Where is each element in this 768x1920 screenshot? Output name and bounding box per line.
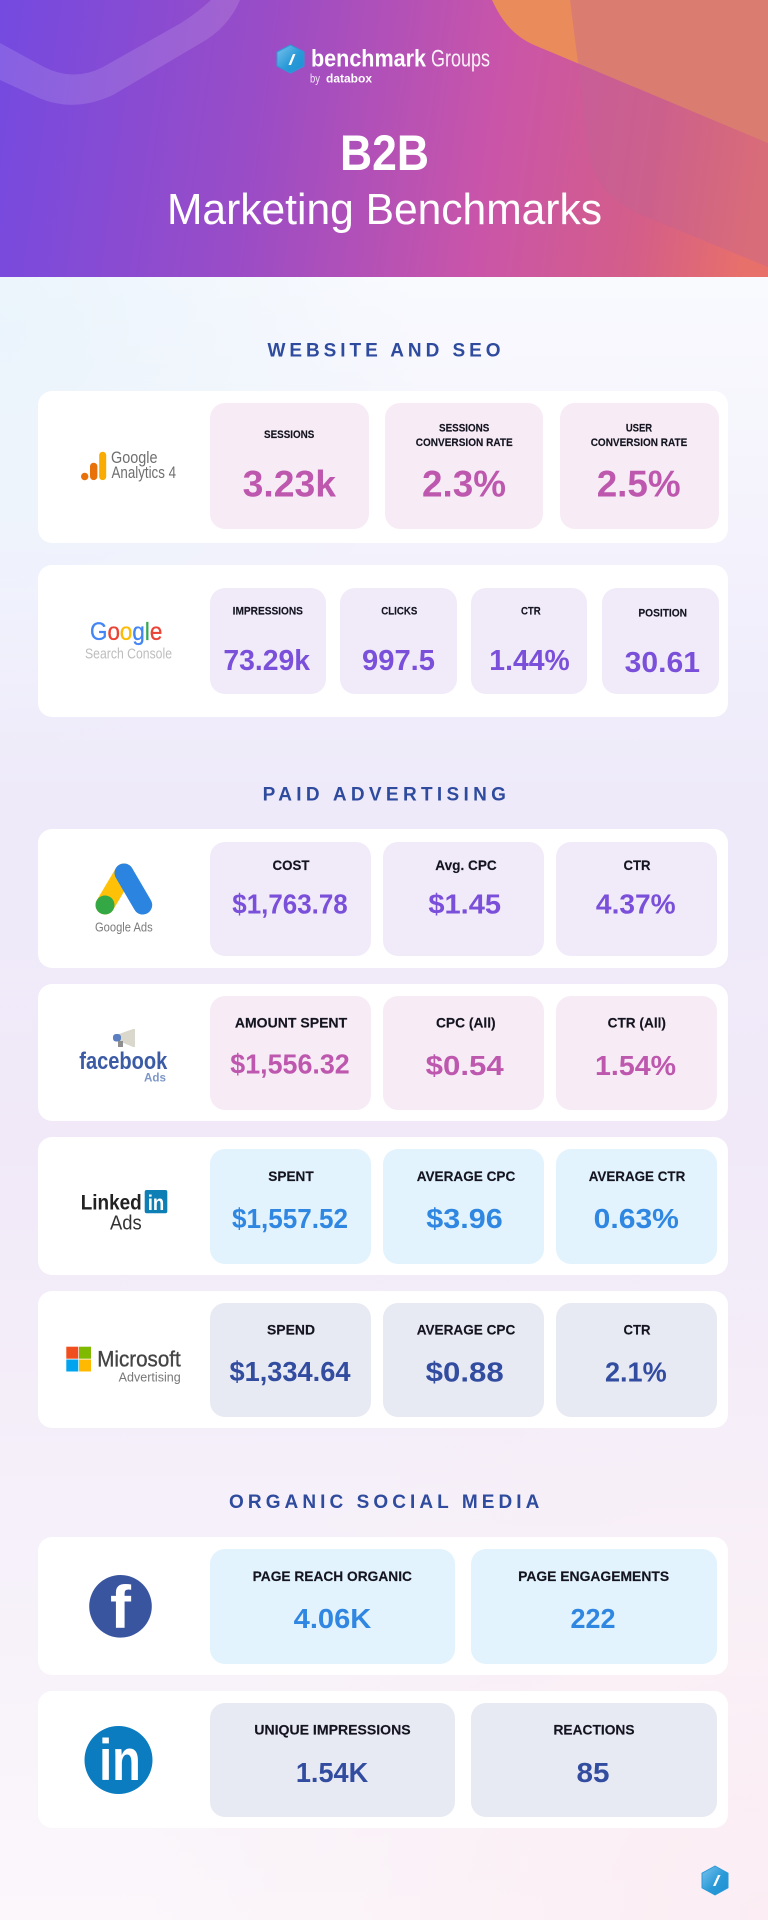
metric: cost bbox=[210, 842, 371, 956]
metric: ctr: 4.37% bbox=[596, 888, 676, 920]
metric: page engagements: PAGE ENGAGEMENTS bbox=[518, 1568, 669, 1584]
icon: footer benchmark hexagon bbox=[702, 1866, 728, 1895]
metric: ctr: CTR bbox=[521, 606, 541, 618]
icon: linkedin: in bbox=[99, 1728, 141, 1793]
metric: average cpc bbox=[383, 1303, 544, 1417]
logo wordmark: benchmark bbox=[311, 46, 427, 72]
metric: cost: $1,763.78 bbox=[232, 888, 348, 920]
icon: facebook: f bbox=[110, 1574, 132, 1641]
metric: avg cpc: Avg. CPC bbox=[435, 857, 497, 873]
heading: paid advertising: PAID ADVERTISING bbox=[263, 784, 506, 806]
title: B2B: B2B bbox=[340, 125, 429, 181]
icon: benchmark hexagon bbox=[277, 45, 304, 73]
title: Marketing Benchmarks: Marketing Benchmarks bbox=[167, 185, 602, 234]
logo: google analytics 4: Analytics 4 bbox=[112, 464, 176, 482]
metric: user conversion rate: CONVERSION RATE bbox=[591, 437, 687, 449]
metric: user conversion rate: USER bbox=[626, 422, 652, 434]
panel: linkedin ads bbox=[38, 1137, 728, 1275]
metric: ctr bbox=[556, 842, 717, 956]
logo: linkedin ads: in bbox=[148, 1192, 164, 1215]
metric: ctr: 1.44% bbox=[489, 645, 570, 677]
metric: spend bbox=[210, 1303, 371, 1417]
metric: position: 30.61 bbox=[625, 647, 700, 679]
metric: amount spent bbox=[210, 996, 371, 1110]
metric: impressions: 73.29k bbox=[223, 645, 311, 677]
metric: ctr bbox=[471, 588, 587, 694]
metric: sessions: 3.23k bbox=[243, 464, 336, 504]
logo: google analytics 4 bbox=[81, 449, 176, 482]
logo byline: databox: databox bbox=[326, 74, 373, 86]
metric: page engagements bbox=[471, 1549, 717, 1664]
metric: avg cpc bbox=[383, 842, 544, 956]
metric: cpc all bbox=[383, 996, 544, 1110]
metric: impressions bbox=[210, 588, 326, 694]
metric: sessions conversion rate: 2.3% bbox=[422, 464, 506, 504]
metric: spend: SPEND bbox=[267, 1321, 315, 1337]
metric: ctr: CTR bbox=[624, 857, 650, 873]
metric: page reach organic bbox=[210, 1549, 455, 1664]
metric: page reach organic: 4.06K bbox=[294, 1603, 371, 1634]
metric: spend: $1,334.64 bbox=[230, 1356, 351, 1387]
metric: position: POSITION bbox=[638, 608, 687, 620]
metric: ctr: 2.1% bbox=[605, 1356, 667, 1388]
metric: cpc all: $0.54 bbox=[426, 1050, 504, 1081]
header banner bbox=[0, 0, 768, 277]
metric: sessions conversion rate: CONVERSION RATE bbox=[416, 437, 513, 449]
metric: sessions conversion rate bbox=[385, 403, 543, 529]
logo: benchmark Groups by databox bbox=[277, 45, 490, 86]
logo: microsoft advertising bbox=[66, 1347, 181, 1385]
metric: reactions: 85 bbox=[576, 1757, 610, 1788]
metric: clicks: 997.5 bbox=[362, 645, 435, 677]
metric: user conversion rate bbox=[560, 403, 719, 529]
metric: page engagements: 222 bbox=[570, 1603, 616, 1634]
logo: facebook ads: facebook bbox=[79, 1048, 168, 1075]
metric: average cpc: $3.96 bbox=[426, 1203, 503, 1234]
metric: average cpc bbox=[383, 1149, 544, 1264]
panel: google search console bbox=[38, 565, 728, 717]
logo: microsoft advertising: Microsoft bbox=[97, 1347, 181, 1372]
logo: google ads bbox=[95, 873, 153, 934]
panel: facebook organic bbox=[38, 1537, 728, 1675]
metric: page reach organic: PAGE REACH ORGANIC bbox=[253, 1568, 412, 1584]
metric: impressions: IMPRESSIONS bbox=[233, 606, 303, 618]
metric: average ctr bbox=[556, 1149, 717, 1264]
metric: sessions: SESSIONS bbox=[264, 429, 314, 441]
metric: spent: SPENT bbox=[268, 1168, 314, 1184]
logo: google ads: Google Ads bbox=[95, 920, 153, 934]
metric: user conversion rate: 2.5% bbox=[597, 464, 681, 504]
metric: ctr all: CTR (All) bbox=[608, 1014, 666, 1030]
logo: linkedin ads bbox=[81, 1190, 167, 1234]
logo: google search console: Search Console bbox=[85, 646, 172, 662]
logo byline: by: by bbox=[310, 74, 320, 86]
metric: position bbox=[602, 588, 719, 694]
logo: google analytics 4: Google bbox=[111, 449, 158, 467]
logo: linkedin ads: Ads bbox=[110, 1212, 142, 1234]
icon: megaphone bbox=[113, 1029, 135, 1047]
heading: website and seo: WEBSITE AND SEO bbox=[268, 340, 500, 362]
metric: average cpc: $0.88 bbox=[426, 1356, 504, 1388]
icon: facebook bbox=[89, 1574, 152, 1641]
logo: linkedin ads: Linked bbox=[81, 1191, 142, 1214]
metric: average cpc: AVERAGE CPC bbox=[417, 1321, 515, 1337]
metric: ctr bbox=[556, 1303, 717, 1417]
metric: average ctr: AVERAGE CTR bbox=[589, 1168, 685, 1184]
logo: google search console bbox=[85, 618, 172, 662]
panel: google analytics 4 bbox=[38, 391, 728, 543]
metric: cpc all: CPC (All) bbox=[436, 1014, 496, 1030]
heading: organic social media: ORGANIC SOCIAL MEDIA bbox=[229, 1492, 540, 1513]
metric: amount spent: AMOUNT SPENT bbox=[235, 1014, 348, 1030]
metric: amount spent: $1,556.32 bbox=[230, 1048, 350, 1080]
metric: spent bbox=[210, 1149, 371, 1264]
logo: microsoft advertising: Advertising bbox=[119, 1371, 181, 1385]
logo: facebook ads bbox=[79, 1029, 168, 1084]
metric: unique impressions bbox=[210, 1703, 455, 1817]
logo: google search console: Google bbox=[90, 618, 162, 646]
metric: clicks bbox=[340, 588, 457, 694]
metric: sessions conversion rate: SESSIONS bbox=[439, 422, 489, 434]
panel: microsoft advertising bbox=[38, 1291, 728, 1428]
panel: google ads bbox=[38, 829, 728, 968]
metric: ctr all: 1.54% bbox=[595, 1050, 676, 1081]
metric: ctr all bbox=[556, 996, 717, 1110]
panel: facebook ads bbox=[38, 984, 728, 1121]
logo word: Groups: Groups bbox=[431, 46, 490, 72]
metric: reactions: REACTIONS bbox=[554, 1721, 634, 1737]
metric: unique impressions: 1.54K bbox=[296, 1757, 368, 1788]
metric: unique impressions: UNIQUE IMPRESSIONS bbox=[254, 1721, 411, 1737]
metric: sessions bbox=[210, 403, 369, 529]
logo: facebook ads: Ads bbox=[144, 1070, 166, 1084]
metric: avg cpc: $1.45 bbox=[428, 888, 501, 920]
metric: ctr: CTR bbox=[624, 1321, 650, 1337]
metric: average ctr: 0.63% bbox=[594, 1203, 679, 1234]
panel: linkedin organic bbox=[38, 1691, 728, 1828]
metric: reactions bbox=[471, 1703, 717, 1817]
metric: spent: $1,557.52 bbox=[232, 1203, 348, 1234]
metric: average cpc: AVERAGE CPC bbox=[417, 1168, 515, 1184]
metric: cost: COST bbox=[272, 857, 310, 873]
metric: clicks: CLICKS bbox=[381, 606, 417, 618]
